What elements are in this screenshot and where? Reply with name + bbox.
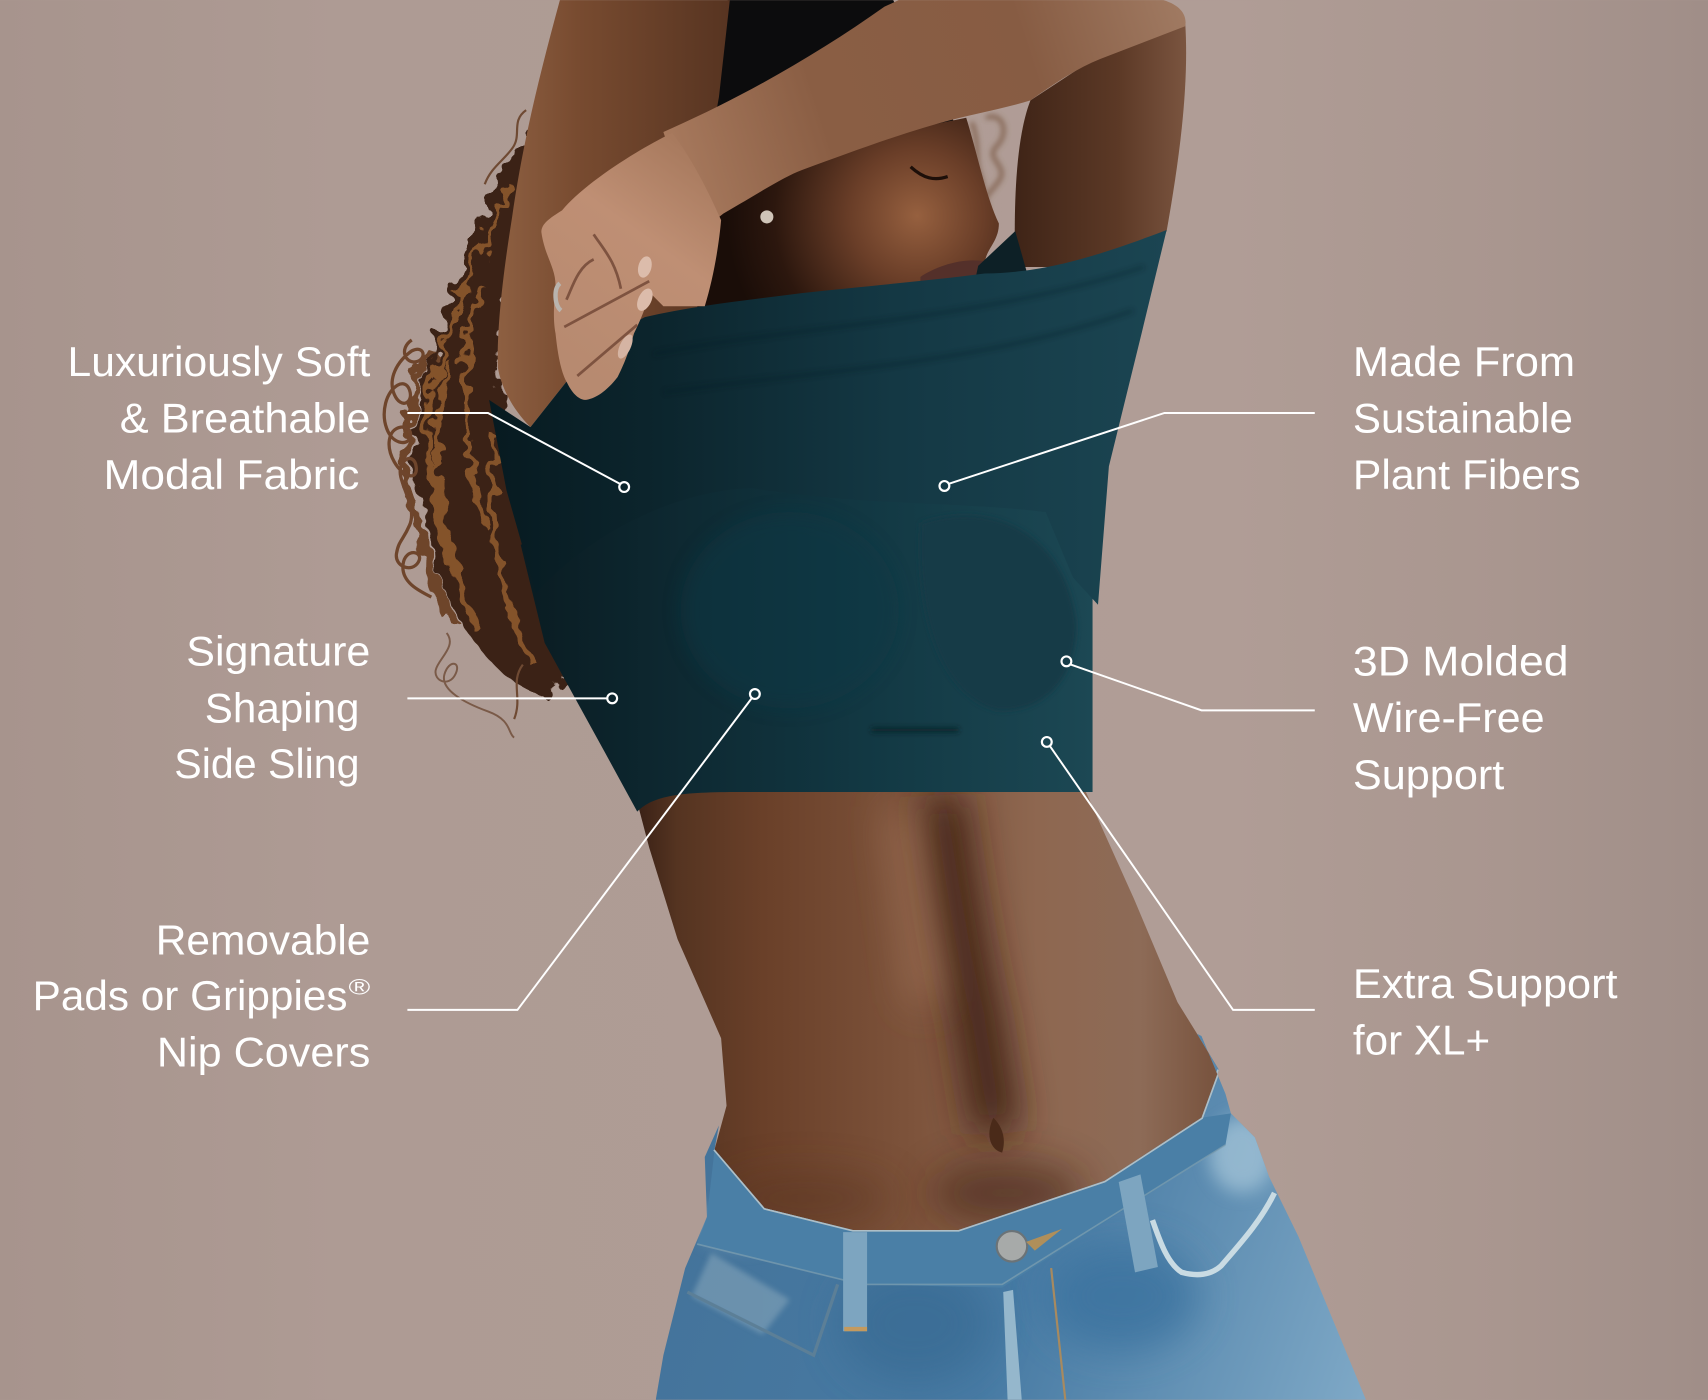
hair [384,110,572,738]
left upper arm [498,0,730,427]
right upper arm [1015,22,1186,267]
callout: sustainable plant fibers: Plant Fibers [1353,452,1581,498]
left coin pocket [692,1253,790,1335]
bra cups [681,512,899,708]
callout: luxuriously soft modal fabric: & Breathable [120,396,370,442]
left pocket edge [687,1284,838,1355]
photo: woman lifting top [384,0,1383,1400]
rolled shirt [489,230,1167,605]
callout: removable pads or grippies: Pads or Grippies [33,973,347,1019]
callout: removable pads or grippies [33,689,760,1076]
callout: 3D molded wire-free support: Support [1353,752,1505,798]
callout: sustainable plant fibers [940,339,1581,498]
curls beside face [972,117,1004,209]
callout: signature shaping side sling: Side Sling [174,741,359,787]
dark shirt interior by chin [975,231,1029,281]
callout: extra support for XL+: for XL+ [1353,1018,1490,1064]
torso [621,784,1231,1242]
back black top at neck [708,0,959,185]
button and zip pull [997,1231,1027,1262]
callout: luxuriously soft modal fabric: Modal Fabric [103,452,359,498]
light band beside shadow [902,806,926,1002]
callout: extra support for XL+: Extra Support [1353,961,1618,1007]
callout: signature shaping side sling [174,629,617,787]
belt loops [843,1232,867,1331]
hand / fist [541,133,721,400]
shirt fold lines [654,267,1144,392]
bra [521,458,1093,812]
callout: removable pads or grippies: Removable [156,917,370,963]
callout: sustainable plant fibers: Sustainable [1353,396,1573,442]
bra hem line [871,728,959,732]
callout: removable pads or grippies: Nip Covers [157,1030,370,1076]
callout: removable pads or grippies: ® [349,975,370,1000]
eye, mouth and ear details [760,167,986,288]
abdominal shadow [940,795,997,1133]
callout: signature shaping side sling: Signature [186,629,370,675]
lower belly shading [931,1162,1084,1223]
callout: 3D molded wire-free support [1062,638,1569,798]
jeans waistband [697,1113,1231,1288]
forearm crossing over head [663,0,1186,234]
jeans [643,1024,1383,1400]
callout: luxuriously soft modal fabric: Luxuriously Soft [68,339,371,385]
callout: 3D molded wire-free support: 3D Molded [1353,638,1569,684]
callout: sustainable plant fibers: Made From [1353,339,1575,385]
navel [989,1118,1004,1153]
jeans dark and light washes [856,1286,979,1370]
head and face [697,118,999,321]
fly [1003,1290,1022,1400]
callout: 3D molded wire-free support: Wire-Free [1353,695,1545,741]
right pocket edge [1152,1193,1274,1275]
callout: signature shaping side sling: Shaping [205,685,359,731]
callout: extra support for XL+ [1042,737,1618,1064]
callout: luxuriously soft modal fabric [68,339,629,498]
